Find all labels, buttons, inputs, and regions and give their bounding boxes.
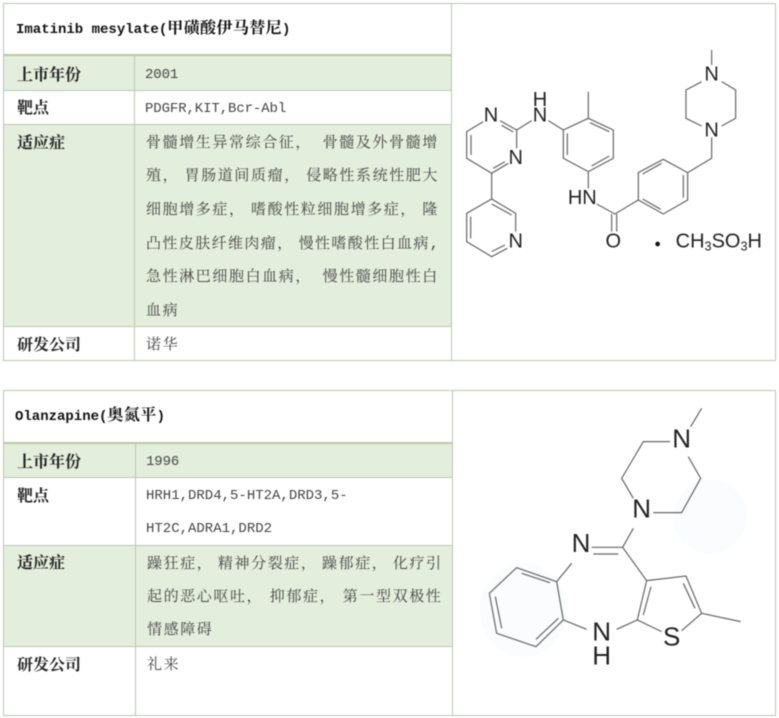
title: imatinib: Imatinib mesylate(甲磺酸伊马替尼) xyxy=(16,20,290,38)
value: indications: 急性淋巴细胞白血病， 慢性髓细胞性白 xyxy=(146,269,439,286)
value: market year: 1996 xyxy=(146,454,179,470)
label: company: 研发公司 xyxy=(17,657,81,675)
label: company: 研发公司 xyxy=(17,337,81,355)
atom labels: imatinib: N xyxy=(533,104,547,126)
value: indications: 细胞增多症， 嗜酸性粒细胞增多症， 隆 xyxy=(146,202,439,219)
row background: indications xyxy=(4,546,452,646)
value: indications: 殖， 胃肠道间质瘤， 侵略性系统性肥大 xyxy=(146,168,439,185)
value: indications: 躁狂症， 精神分裂症， 躁郁症， 化疗引 xyxy=(147,556,443,573)
atom labels: imatinib: HN xyxy=(568,187,597,209)
salt label: mesylate: H xyxy=(747,230,762,252)
atom labels: olanzapine: H xyxy=(592,641,611,671)
value: targets: HT2C,ADRA1,DRD2 xyxy=(146,521,272,537)
salt label: mesylate xyxy=(655,230,762,254)
salt label: mesylate: CH xyxy=(676,230,705,252)
value: indications: 起的恶心呕吐， 抑郁症， 第一型双极性 xyxy=(147,589,442,606)
value: indications: 骨髓增生异常综合征， 骨髓及外骨髓增 xyxy=(146,135,439,152)
panel: imatinib card xyxy=(2,2,776,362)
value: indications: 情感障碍 xyxy=(147,622,213,639)
atom labels: imatinib: N xyxy=(704,120,719,142)
label: indications: 适应症 xyxy=(17,555,65,573)
value: indications: 凸性皮肤纤维肉瘤， 慢性嗜酸性白血病, xyxy=(146,236,440,253)
atom labels: imatinib: N xyxy=(508,147,523,169)
value: market year: 2001 xyxy=(145,67,178,83)
value: company: 礼来 xyxy=(147,657,180,674)
watermark: faint blobs xyxy=(480,480,747,657)
label: targets: 靶点 xyxy=(17,488,49,506)
atom labels: olanzapine: N xyxy=(672,423,691,453)
atom labels: olanzapine xyxy=(572,423,691,671)
value: targets: PDGFR,KIT,Bcr-Abl xyxy=(145,101,286,117)
atom labels: olanzapine: N xyxy=(592,617,611,647)
label: market year: 上市年份 xyxy=(17,67,81,85)
atom labels: imatinib: N xyxy=(484,104,498,126)
panel: olanzapine card xyxy=(2,390,776,716)
title: olanzapine: Olanzapine(奥氮平) xyxy=(15,407,165,425)
value: company: 诺华 xyxy=(146,337,179,354)
salt label: mesylate: 3 xyxy=(705,240,712,254)
atom labels: imatinib: O xyxy=(606,230,621,252)
value: indications xyxy=(146,554,443,639)
value: indications xyxy=(146,134,440,320)
label: market year: 上市年份 xyxy=(17,454,81,472)
atom labels: olanzapine: S xyxy=(663,621,680,651)
atom labels: olanzapine: N xyxy=(632,494,651,524)
value: targets xyxy=(146,488,348,537)
atom labels: imatinib: N xyxy=(508,230,523,252)
salt label: mesylate: SO xyxy=(712,230,740,252)
atom labels: imatinib xyxy=(484,64,719,252)
row background: market year xyxy=(4,443,452,477)
atom labels: olanzapine: N xyxy=(572,528,590,558)
chart: olanzapine structure xyxy=(480,408,747,671)
atom labels: imatinib: H xyxy=(533,89,547,111)
salt label: mesylate: 3 xyxy=(740,240,747,254)
label: targets: 靶点 xyxy=(17,100,49,118)
label: indications: 适应症 xyxy=(17,135,65,153)
atom labels: imatinib: N xyxy=(704,64,719,86)
row background: indications xyxy=(4,125,451,326)
value: indications: 血病 xyxy=(146,303,179,320)
row background: market year xyxy=(4,55,451,90)
value: targets: HRH1,DRD4,5-HT2A,DRD3,5- xyxy=(146,488,348,504)
